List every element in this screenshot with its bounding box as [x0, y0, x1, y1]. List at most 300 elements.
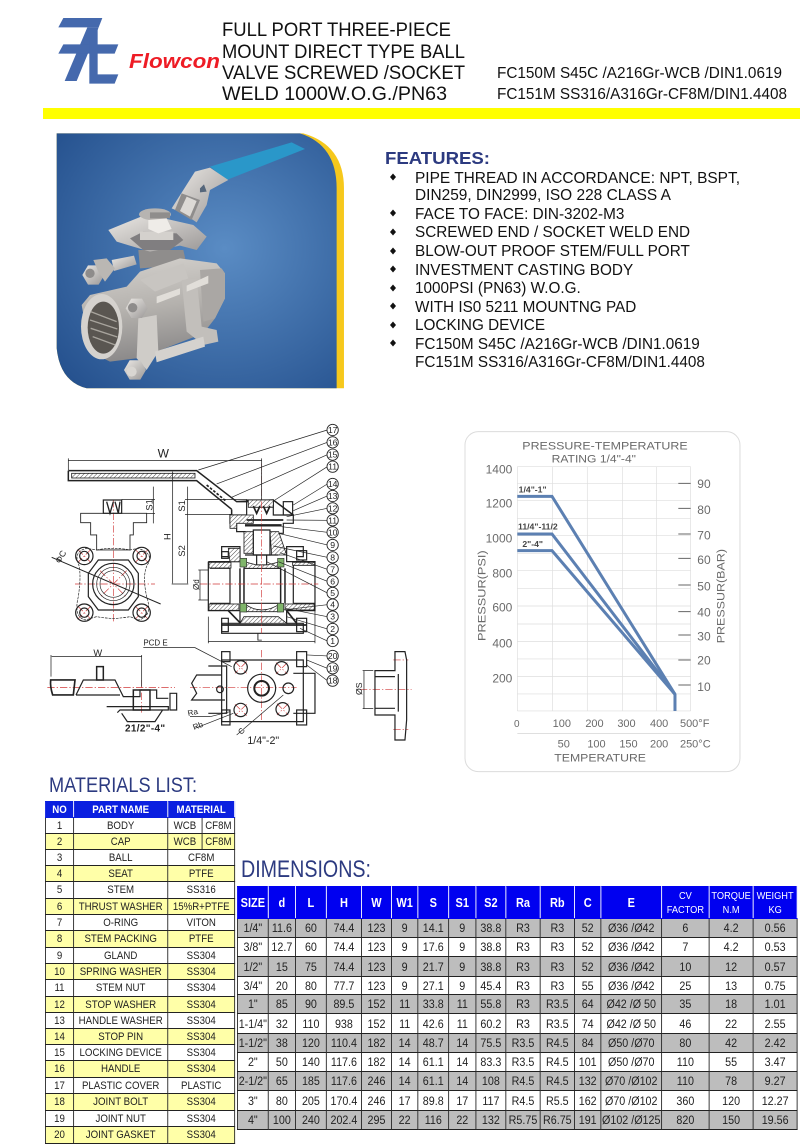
callout numbers: 12 [328, 503, 338, 513]
grid [517, 467, 691, 711]
dimensions table: 77.7 [333, 978, 354, 992]
callout numbers: 15 [328, 450, 338, 460]
green seats [240, 558, 284, 612]
right axis BAR: 60 [697, 553, 711, 567]
dimensions table: 11 [399, 1016, 410, 1030]
size labels: 2"-4" [522, 539, 543, 549]
dimensions table: 1-1/2" [239, 1036, 267, 1050]
callout numbers: 11 [328, 462, 337, 472]
title: MOUNT DIRECT TYPE BALL [222, 42, 465, 63]
dimensions table: 1.01 [765, 997, 786, 1011]
dimensions table: 4.2 [724, 940, 739, 954]
dimensions table: 27.1 [423, 978, 444, 992]
dimensions table: 32 [276, 1016, 288, 1030]
dimensions table: 74 [582, 1016, 594, 1030]
features list: WITH IS0 5211 MOUNTNG PAD [415, 299, 636, 316]
materials list table: SEAT [108, 868, 133, 880]
materials list table: NO [52, 804, 67, 816]
materials list table: SS304 [187, 1096, 216, 1108]
materials list table: 9 [57, 950, 62, 962]
callout numbers: 17 [328, 425, 338, 435]
dimensions table: 22 [456, 1113, 468, 1127]
dimensions table: 152 [368, 997, 385, 1011]
dimensions table: 1/4" [243, 921, 262, 935]
dimensions table: 78 [725, 1074, 737, 1088]
materials list table: BALL [109, 852, 133, 864]
left axis PSI: 600 [492, 601, 513, 615]
dimensions table: 14 [399, 1036, 411, 1050]
dimensions table: 80 [305, 978, 317, 992]
materials list table: 19 [54, 1112, 65, 1124]
dimensions table: 38 [276, 1036, 288, 1050]
materials list table: CF8M [205, 820, 232, 832]
dimensions table: R3 [516, 978, 530, 992]
technical drawing [47, 424, 412, 747]
dimensions table: 9 [402, 960, 408, 974]
materials list table: PTFE [189, 868, 214, 880]
dimensions table: 117 [482, 1094, 499, 1108]
materials list table: THRUST WASHER [79, 900, 163, 912]
dimensions table: H [340, 896, 348, 910]
dimensions table: Ø42 /Ø 50 [606, 997, 656, 1011]
temperature axes: 0 [514, 719, 520, 730]
size labels [518, 485, 558, 549]
dimensions table: 12 [725, 960, 737, 974]
temperature axes: 150 [619, 738, 638, 750]
drawing dimension labels: ØS [354, 682, 364, 695]
features list: PIPE THREAD IN ACCORDANCE: NPT, BSPT, [415, 170, 740, 187]
dimensions table: 120 [302, 1036, 320, 1050]
dimensions table: 9 [459, 978, 465, 992]
dimensions table: SIZE [241, 896, 265, 910]
callout numbers: 19 [328, 663, 338, 673]
dimensions table: R4.5 [546, 1055, 569, 1069]
dimensions table: 182 [368, 1055, 385, 1069]
callout numbers: 4 [330, 600, 335, 610]
materials list table: 10 [54, 966, 65, 978]
dimensions table: S1 [456, 896, 469, 910]
materials list table: STEM PACKING [84, 933, 157, 945]
callout numbers: 6 [330, 576, 335, 586]
dimensions table: 3/4" [243, 978, 262, 992]
size labels: 1/4"-1" [519, 485, 547, 495]
materials list table: 3 [57, 852, 62, 864]
dimensions table: 89.8 [423, 1094, 444, 1108]
dimensions table: 11 [457, 997, 468, 1011]
dimensions table: 4.2 [724, 921, 739, 935]
features list: FACE TO FACE: DIN-3202-M3 [415, 206, 624, 223]
right axis BAR: 20 [697, 654, 711, 668]
pressure-temperature chart [465, 432, 740, 772]
left axis PSI: 1400 [486, 463, 513, 477]
callout numbers: 10 [328, 527, 338, 537]
dimensions table: 12.27 [762, 1094, 789, 1108]
materials list table: SS304 [187, 1129, 216, 1141]
small handle view 2.5-4 inch [51, 667, 177, 722]
materials list table: 8 [57, 933, 62, 945]
temperature axes: TEMPERATURE [554, 752, 646, 764]
dimensions table: Ø36 /Ø42 [608, 940, 654, 954]
callout numbers [327, 424, 338, 686]
dimensions table: 60.2 [480, 1016, 501, 1030]
dimensions table: CV [679, 890, 692, 902]
dimensions table: R6.75 [543, 1113, 572, 1127]
materials list table: 4 [57, 868, 62, 880]
model numbers [497, 65, 787, 103]
dimensions table: 64 [582, 997, 594, 1011]
dimensions table: 170.4 [330, 1094, 357, 1108]
features list: FC151M SS316/A316Gr-CF8M/DIN1.4408 [415, 354, 705, 371]
dimensions table: 185 [302, 1074, 320, 1088]
dimensions table: 55.8 [480, 997, 501, 1011]
dimensions table: E [628, 896, 635, 910]
dimensions table: 35 [679, 997, 691, 1011]
materials list table: 11 [54, 982, 65, 994]
temperature axes: 200 [585, 718, 604, 730]
callout numbers: 13 [328, 491, 338, 501]
materials list table: CAP [111, 836, 131, 848]
dimensions table: 52 [582, 940, 594, 954]
dimensions table: W1 [396, 896, 413, 910]
dimensions table: 11.6 [272, 921, 292, 935]
handle side view [68, 471, 293, 520]
dimensions table: 42.6 [423, 1016, 444, 1030]
dimensions table: 7 [682, 940, 688, 954]
right axis BAR [678, 477, 727, 694]
chart title: RATING 1/4"-4" [552, 454, 636, 466]
drawing dimension labels: W [158, 446, 170, 460]
right axis BAR: 10 [697, 680, 711, 694]
features list [390, 170, 740, 371]
product photo panel [57, 133, 344, 388]
features list: SCREWED END / SOCKET WELD END [415, 224, 690, 241]
temperature axes: 250°C [680, 738, 711, 750]
dimensions table: R3 [516, 921, 530, 935]
size labels: 11/4"-11/2 [518, 522, 558, 532]
title: VALVE SCREWED /SOCKET [222, 63, 465, 84]
features list: FC150M S45C /A216Gr-WCB /DIN1.0619 [415, 336, 700, 353]
chart title [522, 440, 688, 466]
dimensions table: Ø102 /Ø125 [602, 1113, 660, 1127]
dimensions table: 61.1 [423, 1055, 444, 1069]
materials list table: 5 [57, 884, 62, 896]
centre lines [47, 463, 412, 729]
dimensions table: 15 [276, 960, 288, 974]
dimensions table: 14 [456, 1055, 468, 1069]
dimensions table: 38.8 [480, 940, 501, 954]
materials list table: CF8M [205, 836, 232, 848]
materials list table: SS304 [187, 1030, 216, 1042]
materials list table: 13 [54, 1014, 65, 1026]
callout numbers: 20 [328, 651, 338, 661]
materials list table: JOINT GASKET [86, 1129, 156, 1141]
dimensions table: 2-1/2" [239, 1074, 267, 1088]
dimensions table: FACTOR [667, 904, 704, 916]
callout numbers: 3 [330, 612, 335, 622]
dimensions table: S [430, 896, 437, 910]
dimensions table: 74.4 [333, 940, 354, 954]
dimensions table: R3.5 [546, 997, 569, 1011]
left axis PSI: 200 [492, 671, 513, 685]
dimensions table: 0.75 [765, 978, 786, 992]
dimensions table: 3/8" [243, 940, 262, 954]
dimensions table: W [371, 896, 382, 910]
materials list table: WCB [174, 836, 196, 848]
materials list table: 1 [57, 820, 62, 832]
logo: Flowcon: Flowcon [129, 51, 220, 73]
dimensions table: 110 [302, 1016, 319, 1030]
dimensions table: TORQUE [711, 890, 751, 902]
dimensions table: 45.4 [480, 978, 501, 992]
right axis BAR: 90 [697, 477, 711, 491]
dimensions table: 9 [459, 921, 465, 935]
dimensions table: 12.7 [271, 940, 292, 954]
drawing dimension labels: Ra [187, 707, 199, 718]
dimensions table: 0.57 [765, 960, 786, 974]
temperature axes: 50 [558, 738, 570, 750]
features list: LOCKING DEVICE [415, 317, 545, 334]
materials list table: 18 [54, 1096, 65, 1108]
left axis PSI: 1200 [486, 496, 513, 510]
dimensions table: 50 [276, 1055, 288, 1069]
dimensions table: R4.5 [512, 1094, 534, 1108]
drawing dimension labels: S2 [177, 545, 187, 557]
dimensions table: Ø70 /Ø102 [605, 1074, 657, 1088]
dimensions table: 83.3 [480, 1055, 501, 1069]
dimensions table: 3.47 [765, 1055, 786, 1069]
callout numbers: 7 [330, 564, 335, 574]
dimensions table: 246 [368, 1094, 385, 1108]
dimensions table: 20 [276, 978, 288, 992]
features [385, 148, 740, 371]
dimensions table: 0.53 [765, 940, 786, 954]
dimensions table: 2.55 [765, 1016, 786, 1030]
dimensions table: 9 [402, 940, 408, 954]
callout numbers: 9 [330, 540, 335, 550]
drawing dimension labels: S1 [145, 499, 155, 511]
dimensions table: 820 [676, 1113, 694, 1127]
right axis BAR: 50 [697, 579, 711, 593]
dimensions table: WEIGHT [757, 890, 794, 902]
callout numbers: 8 [330, 552, 335, 562]
dimensions table: 52 [582, 921, 594, 935]
dimensions table: Ø50 /Ø70 [608, 1055, 654, 1069]
materials list table: JOINT BOLT [93, 1096, 148, 1108]
right axis BAR: 70 [697, 528, 711, 542]
materials list table: 12 [54, 998, 65, 1010]
dimensions table: 22 [725, 1016, 737, 1030]
dimension lines [51, 458, 373, 709]
dimensions table: 9 [402, 978, 408, 992]
materials list table: STOP PIN [98, 1030, 143, 1042]
drawing dimension labels: H [163, 533, 173, 540]
dimensions table: R5.75 [509, 1113, 537, 1127]
materials list table: SS304 [187, 950, 216, 962]
dimensions table: 123 [368, 960, 385, 974]
dimensions table: 75.5 [480, 1036, 501, 1050]
dimensions table: 52 [582, 960, 594, 974]
features list: DIN259, DIN2999, ISO 228 CLASS A [415, 187, 672, 204]
drawing dimension labels: S1 [177, 500, 187, 512]
dimensions table: Ø36 /Ø42 [608, 978, 654, 992]
callout numbers: 5 [330, 588, 335, 598]
materials list table: BODY [107, 820, 134, 832]
dimensions table: 9.27 [765, 1074, 786, 1088]
dimensions table: 110 [677, 1055, 694, 1069]
dimensions table: 0.56 [765, 921, 786, 935]
dimensions table: 19.56 [762, 1113, 789, 1127]
dimensions table: 3" [248, 1094, 258, 1108]
materials list table: PART NAME [92, 804, 149, 816]
dimensions table: 17.6 [423, 940, 444, 954]
dimensions table: 42 [725, 1036, 737, 1050]
top view 1/4-2 inch [143, 648, 315, 735]
dimensions table: 84 [582, 1036, 594, 1050]
right axis BAR: 40 [697, 606, 711, 620]
dimensions table: 60 [305, 940, 317, 954]
features list: INVESTMENT CASTING BODY [415, 262, 633, 279]
dimensions table: 46 [679, 1016, 691, 1030]
dimensions table: R4.5 [546, 1036, 569, 1050]
callout numbers: 1 [330, 636, 335, 646]
dimensions table: 55 [725, 1055, 737, 1069]
materials list heading: MATERIALS LIST: [49, 774, 197, 797]
temperature axes: 100 [553, 718, 571, 730]
drawing dimension labels [53, 446, 364, 747]
materials list table: PTFE [189, 933, 214, 945]
yellow header bar [43, 108, 800, 119]
left axis PSI: 1000 [486, 531, 513, 545]
dimensions table: 938 [335, 1016, 353, 1030]
drawing dimension labels: 1/4"-2" [247, 735, 279, 747]
dimensions table: R4.5 [512, 1074, 534, 1088]
materials list table: SS304 [187, 982, 216, 994]
dimensions table: 21.7 [423, 960, 444, 974]
dimensions table: 152 [368, 1016, 385, 1030]
dimensions table: 240 [302, 1113, 320, 1127]
materials list table: STEM NUT [96, 982, 145, 994]
dimensions table: 202.4 [330, 1113, 357, 1127]
drawing dimension labels: PCD E [143, 639, 168, 648]
right flange view [375, 652, 407, 740]
dimensions table: 38.8 [480, 960, 501, 974]
materials list table: STEM [107, 884, 134, 896]
dimensions table: 110 [677, 1074, 694, 1088]
materials list table: HANDLE WASHER [79, 1014, 163, 1026]
dimensions table: 2.42 [765, 1036, 786, 1050]
materials list table: STOP WASHER [85, 998, 156, 1010]
dimensions table: 182 [368, 1036, 385, 1050]
materials list table: JOINT NUT [95, 1112, 146, 1124]
materials list table: GLAND [104, 950, 137, 962]
materials list table: 14 [54, 1030, 65, 1042]
callout numbers: 18 [328, 676, 338, 686]
materials list table: 2 [57, 836, 62, 848]
dimensions table: 6 [682, 921, 688, 935]
dimensions table: R3 [550, 921, 564, 935]
left end view [52, 500, 161, 621]
dimensions table: 2" [248, 1055, 258, 1069]
temperature axes: 100 [587, 738, 606, 750]
dimensions table: R3.5 [512, 1055, 534, 1069]
dimensions table: 1/2" [243, 960, 262, 974]
dimensions table: 60 [305, 921, 317, 935]
model numbers: FC151M SS316/A316Gr-CF8M/DIN1.4408 [497, 86, 787, 103]
left axis PSI [477, 463, 513, 685]
dimensions table: Ra [516, 896, 530, 910]
dimensions table: R3 [516, 1016, 530, 1030]
materials list table: O-RING [103, 916, 138, 928]
callout numbers: 2 [330, 624, 335, 634]
model numbers: FC150M S45C /A216Gr-WCB /DIN1.0619 [497, 65, 782, 82]
drawing dimension labels: 21/2"-4" [125, 724, 165, 735]
callout numbers: 14 [328, 479, 338, 489]
dimensions table: 11 [457, 1016, 468, 1030]
dimensions table: 74.4 [333, 921, 354, 935]
materials list table: PLASTIC COVER [82, 1080, 159, 1092]
dimensions table: 132 [579, 1074, 597, 1088]
materials list table: VITON [187, 916, 216, 928]
dimensions table: 9 [459, 960, 465, 974]
dimensions table: 246 [368, 1074, 385, 1088]
dimensions table: R3 [550, 978, 564, 992]
materials list table: SS304 [187, 1063, 216, 1075]
dimensions table: 89.5 [333, 997, 354, 1011]
features list: 1000PSI (PN63) W.O.G. [415, 280, 581, 297]
materials list table: SS304 [187, 1046, 216, 1058]
drawing dimension labels: Rb [192, 720, 205, 732]
dimensions table: 48.7 [423, 1036, 444, 1050]
dimensions table: 123 [368, 921, 385, 935]
materials list table: SS304 [187, 1014, 216, 1026]
dimensions table: R3.5 [546, 1016, 569, 1030]
dimensions table: 17 [456, 1094, 468, 1108]
dimensions table: R3 [516, 940, 530, 954]
dimensions table: 14 [456, 1036, 468, 1050]
dimensions table: R5.5 [546, 1094, 569, 1108]
callout numbers: 16 [328, 437, 338, 447]
valve section [208, 500, 315, 633]
right axis BAR: 30 [697, 630, 711, 644]
dimensions table: 13 [725, 978, 737, 992]
dimensions table: 75 [305, 960, 317, 974]
dimensions table: Ø36 /Ø42 [608, 960, 654, 974]
dimensions table: 25 [679, 978, 691, 992]
dimensions table: 85 [276, 997, 288, 1011]
callout numbers: 11 [328, 515, 337, 525]
dimensions table: 110.4 [331, 1036, 357, 1050]
materials list table: 7 [57, 916, 62, 928]
dimensions table: 22 [399, 1113, 411, 1127]
dimensions table: R3 [550, 940, 564, 954]
dimensions table: 74.4 [333, 960, 354, 974]
dimensions table: 132 [482, 1113, 500, 1127]
materials list table: 15 [54, 1046, 65, 1058]
materials list table: 16 [54, 1063, 65, 1075]
dimensions table: 65 [276, 1074, 288, 1088]
dimensions table: KG [768, 904, 782, 916]
materials list table: SS304 [187, 998, 216, 1010]
dimensions table: S2 [484, 896, 498, 910]
dimensions table: 360 [676, 1094, 694, 1108]
materials list table [45, 801, 236, 1144]
temperature axes [514, 718, 711, 764]
dimensions table: 101 [579, 1055, 597, 1069]
materials list table: HANDLE [101, 1063, 140, 1075]
drawing dimension labels: C [236, 726, 247, 736]
temperature axes: 300 [617, 718, 636, 730]
chart title: PRESSURE-TEMPERATURE [522, 440, 688, 452]
